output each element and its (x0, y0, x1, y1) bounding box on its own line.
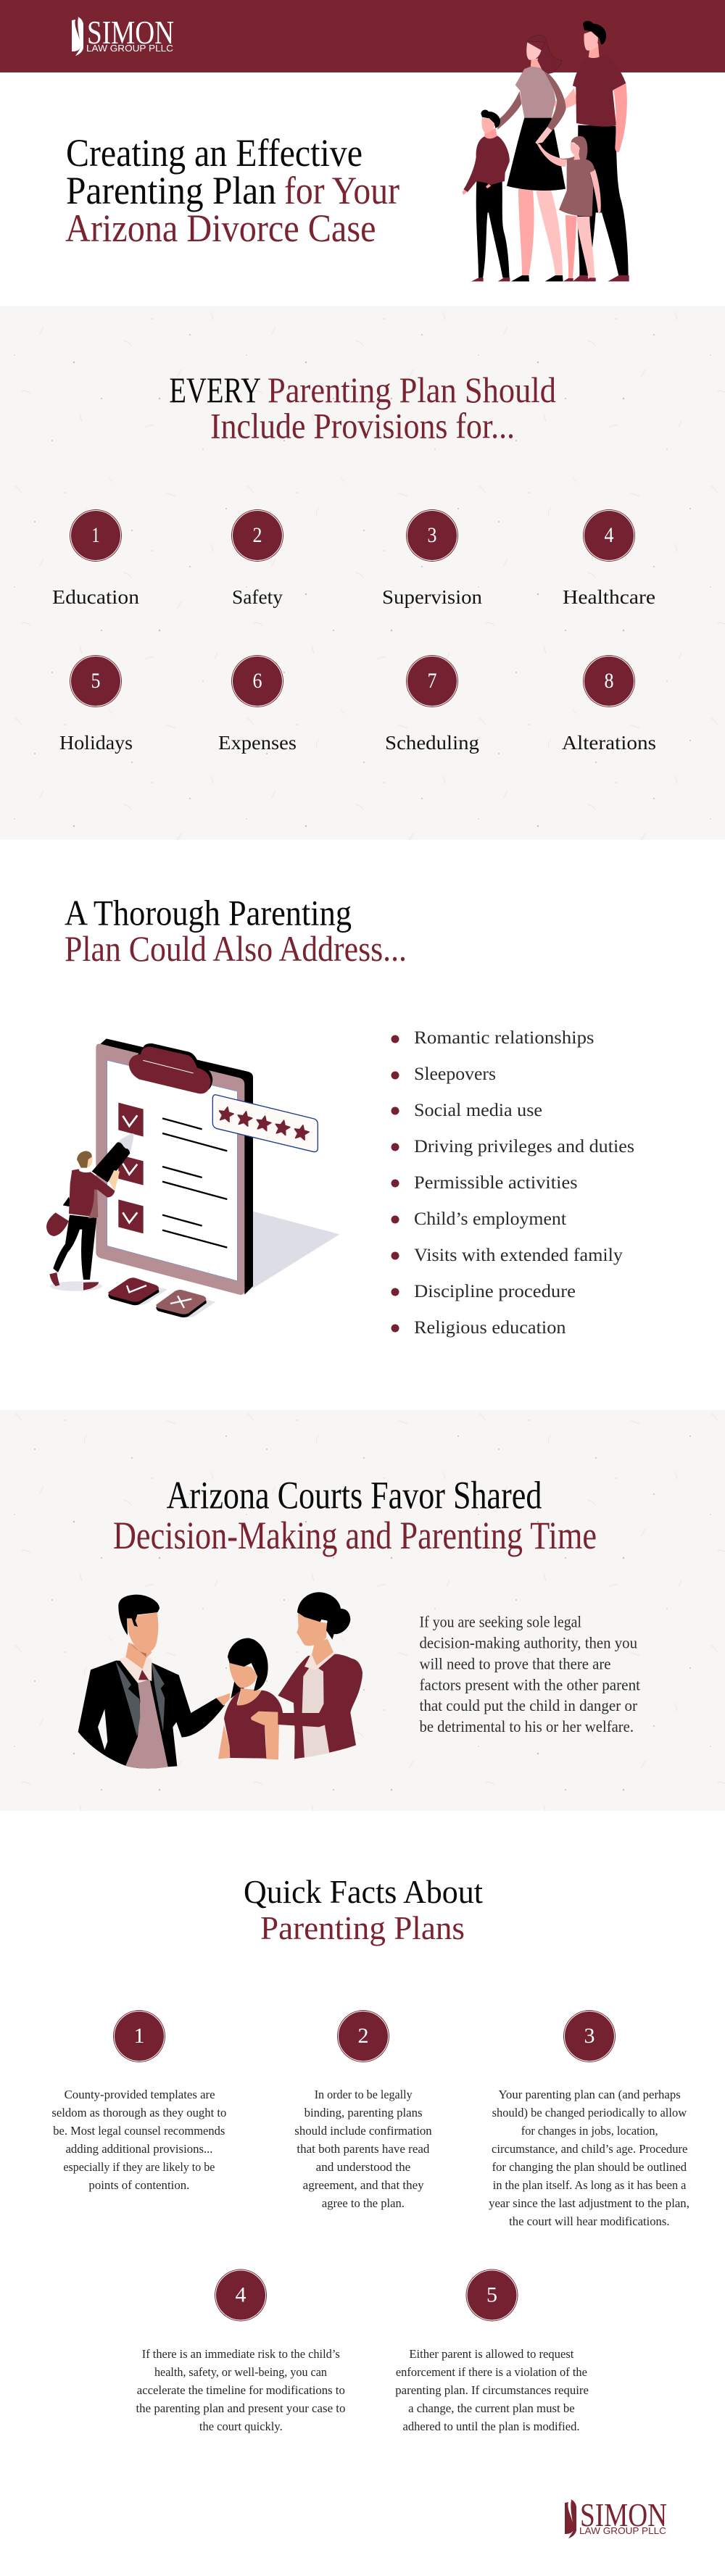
fact 2: should include confirmation (294, 2124, 432, 2138)
heading: Plan Could Also Address... (65, 928, 407, 969)
checkboxes (118, 1103, 144, 1233)
logo: Simon Law Group (footer): LAW GROUP PLLC (579, 2525, 666, 2536)
logo: Simon Law Group (header): LAW GROUP PLLC (86, 43, 173, 54)
fact 1 (51, 2010, 226, 2192)
item 7: Scheduling: Scheduling (385, 732, 479, 754)
panel: Arizona courts (0, 1410, 725, 1811)
fact 2: agreement, and that they (303, 2178, 424, 2192)
item 8: Alterations: 8 (605, 669, 613, 693)
fact 5: a change, the current plan must be (408, 2401, 575, 2415)
mother (251, 1592, 362, 1759)
fact 5: parenting plan. If circumstances require (395, 2383, 589, 2397)
clip (129, 1043, 212, 1093)
panel: every plan should include (0, 306, 725, 840)
item 7: Scheduling (385, 655, 479, 754)
item 2: Safety (231, 509, 283, 608)
fact 1: seldom as thorough as they ought to (51, 2106, 226, 2119)
item 1: Education: 1 (91, 523, 100, 547)
item 8: Alterations (562, 655, 656, 754)
fact 3: year since the last adjustment to the plan, (489, 2196, 689, 2210)
woman figure (497, 36, 566, 281)
bullet list: Driving privileges and duties (414, 1137, 634, 1156)
title (65, 131, 399, 250)
girl figure (536, 136, 601, 281)
fact 5: 5 (486, 2283, 497, 2307)
illustration: family of four (462, 21, 629, 281)
item 4: Healthcare (563, 509, 655, 608)
checklist lines (162, 1118, 227, 1248)
illustration: parents and child (78, 1592, 362, 1769)
item 3: Supervision (382, 509, 483, 608)
fact 3: the court will hear modifications. (509, 2214, 670, 2228)
fact 1: points of contention. (88, 2178, 189, 2192)
fact 2: 2 (358, 2024, 368, 2048)
fact 5: enforcement if there is a violation of the (396, 2365, 587, 2379)
item 3: Supervision: Supervision (382, 586, 483, 608)
logo: Simon Law Group (header) (72, 14, 174, 56)
item 8: Alterations: Alterations (562, 732, 656, 754)
paragraph (419, 1613, 640, 1735)
item 6: Expenses (218, 655, 297, 754)
fact 3: for changes in jobs, location, (521, 2124, 658, 2138)
heading: A Thorough Parenting (65, 893, 352, 933)
heading: EVERY (169, 370, 261, 410)
fact 1: be. Most legal counsel recommends (53, 2124, 225, 2138)
fact 3: Your parenting plan can (and perhaps (499, 2088, 681, 2101)
illustration: clipboard checklist (46, 1038, 339, 1317)
item 7: Scheduling: 7 (428, 669, 436, 693)
fact 3: in the plan itself. As long as it has been a (493, 2178, 687, 2192)
header band (0, 0, 725, 72)
paragraph: will need to prove that there are (419, 1655, 610, 1672)
bullet list: Social media use (414, 1101, 542, 1120)
item 5: Holidays: Holidays (59, 732, 133, 754)
paragraph: factors present with the other parent (419, 1675, 640, 1694)
fact 4: accelerate the timeline for modifications to (137, 2383, 345, 2397)
item 2: Safety: 2 (252, 523, 262, 547)
logo: Simon Law Group (footer) (565, 2496, 667, 2538)
fact 3: circumstance, and child’s age. Procedure (492, 2142, 687, 2156)
fact 4: the parenting plan and present your case to (136, 2401, 345, 2415)
fact 3 (489, 2010, 689, 2228)
heading: Quick Facts About (244, 1873, 483, 1910)
fact 5: Either parent is allowed to request (409, 2347, 574, 2361)
fact 2: agree to the plan. (322, 2196, 405, 2210)
item 1: Education (52, 509, 140, 608)
bullet list (392, 1028, 634, 1338)
bullet list: Sleepovers (414, 1064, 496, 1084)
fact 4: If there is an immediate risk to the child’s (142, 2347, 340, 2361)
fact 4: the court quickly. (199, 2419, 283, 2433)
panel: thorough parenting plan (0, 840, 725, 1410)
heading: Arizona Courts Favor Shared (167, 1474, 542, 1517)
logo: Simon Law Group (footer): SIMON (580, 2496, 667, 2533)
item 6: Expenses: Expenses (218, 732, 297, 754)
heading: Parenting Plans (260, 1909, 465, 1946)
heading (65, 893, 407, 969)
person with pencil (46, 1128, 137, 1291)
fact 3: for changing the plan should be outlined (492, 2160, 687, 2174)
fact 1: adding additional provisions... (65, 2142, 213, 2156)
heading: Include Provisions for... (210, 406, 515, 446)
heading: Parenting Plan Should (268, 370, 556, 410)
fact 3: should) be changed periodically to allow (492, 2106, 687, 2119)
bullet list: Visits with extended family (414, 1246, 624, 1265)
fact 2: binding, parenting plans (304, 2106, 423, 2119)
fact 4: 4 (235, 2283, 246, 2307)
fact 2: that both parents have read (297, 2142, 430, 2156)
item 5: Holidays (59, 655, 133, 754)
fact 3: 3 (584, 2024, 594, 2048)
fact 1: 1 (133, 2024, 145, 2048)
heading (244, 1873, 483, 1946)
title: Parenting Plan (66, 169, 276, 212)
man figure (553, 21, 629, 281)
bullet list: Permissible activities (414, 1173, 577, 1193)
fact 4 (136, 2269, 345, 2433)
check and cross buttons (108, 1277, 215, 1317)
bullet list: Religious education (414, 1318, 566, 1338)
paragraph: that could put the child in danger or (419, 1696, 638, 1714)
paragraph: If you are seeking sole legal (419, 1613, 581, 1630)
bullet list: Discipline procedure (414, 1282, 576, 1301)
item 3: Supervision: 3 (428, 523, 436, 547)
logo: Simon Law Group (header): SIMON (87, 14, 174, 51)
title: Creating an Effective (66, 131, 362, 175)
item 2: Safety: Safety (232, 586, 283, 608)
fact 1: County-provided templates are (65, 2088, 215, 2101)
heading: Decision-Making and Parenting Time (113, 1514, 597, 1557)
rating card with stars (212, 1095, 318, 1152)
fact 2: In order to be legally (315, 2088, 413, 2101)
panel: quick facts (0, 1811, 725, 2576)
item 4: Healthcare: Healthcare (563, 586, 655, 608)
fact 2: and understood the (316, 2160, 410, 2174)
fact 5 (395, 2269, 589, 2433)
child (218, 1638, 283, 1759)
fact 5: adhered to until the plan is modified. (403, 2419, 580, 2433)
heading (169, 370, 556, 446)
bullet list: Romantic relationships (414, 1028, 594, 1048)
title: for Your (284, 169, 399, 212)
bullet list: Child’s employment (414, 1209, 566, 1229)
fact 2 (294, 2010, 432, 2210)
boy figure (462, 110, 510, 281)
item 1: Education: Education (52, 586, 140, 608)
paragraph: decision-making authority, then you (419, 1633, 637, 1652)
item 6: Expenses: 6 (252, 669, 262, 693)
title: Arizona Divorce Case (65, 207, 376, 250)
item 4: Healthcare: 4 (605, 523, 613, 547)
heading (113, 1474, 597, 1557)
fact 1: especially if they are likely to be (63, 2160, 215, 2174)
item 5: Holidays: 5 (91, 669, 100, 693)
father (78, 1595, 230, 1769)
paragraph: be detrimental to his or her welfare. (419, 1717, 634, 1735)
fact 4: health, safety, or well-being, you can (154, 2365, 327, 2379)
